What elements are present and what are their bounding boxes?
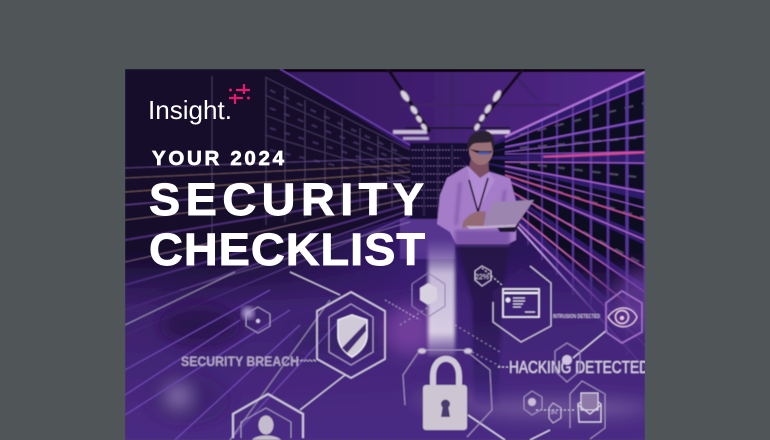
icon: credit card hexagon [493,266,551,342]
neck and head [469,155,489,178]
icon: shield hexagon [317,292,385,378]
left server wall [125,69,410,300]
title [149,147,425,275]
cover illustration [125,69,645,440]
photo layer [125,69,665,440]
title: YOUR 2024 [152,147,285,170]
blurred floor bokeh [152,270,665,424]
left light streaks [125,158,410,335]
icon: small hexagon [412,273,445,317]
icon: 22% badge [475,266,491,286]
icon: padlock [423,359,467,430]
icon: eye hexagon [606,291,642,343]
laptop [483,200,534,226]
back server racks [393,127,510,259]
network connector lines [290,268,607,440]
label: hacking detected: HACKING DETECTED [509,357,649,377]
floor light column [428,238,455,356]
title: CHECKLIST [149,224,425,275]
ceiling lights [388,69,523,132]
person: legs [456,240,510,405]
icon: small diamond hexagon [555,343,580,382]
label: intrusion detected: INTRUSION DETECTED [553,314,600,320]
hexagon: small node [242,307,270,333]
icon: user hexagon [233,394,303,440]
icon: small badge hexagons: 3% [551,410,557,415]
lanyard [469,178,488,212]
hands [462,211,486,228]
icon: 22% badge: 22% [475,274,489,281]
title: SECURITY [149,174,424,225]
logo: Insight [148,84,250,125]
right server wall [460,72,645,375]
logo mark [229,84,250,104]
icon: envelope hexagon [570,381,605,439]
person: upper body [437,131,534,246]
floor perspective lines [125,272,340,440]
logo: Insight: Insight. [148,95,232,125]
icon: padlock frame [403,348,492,437]
shirt [437,166,517,244]
floor fade [125,250,645,440]
background room [125,69,645,382]
label: security breach: SECURITY BREACH [181,354,299,369]
icon: small badge hexagons [524,391,561,423]
